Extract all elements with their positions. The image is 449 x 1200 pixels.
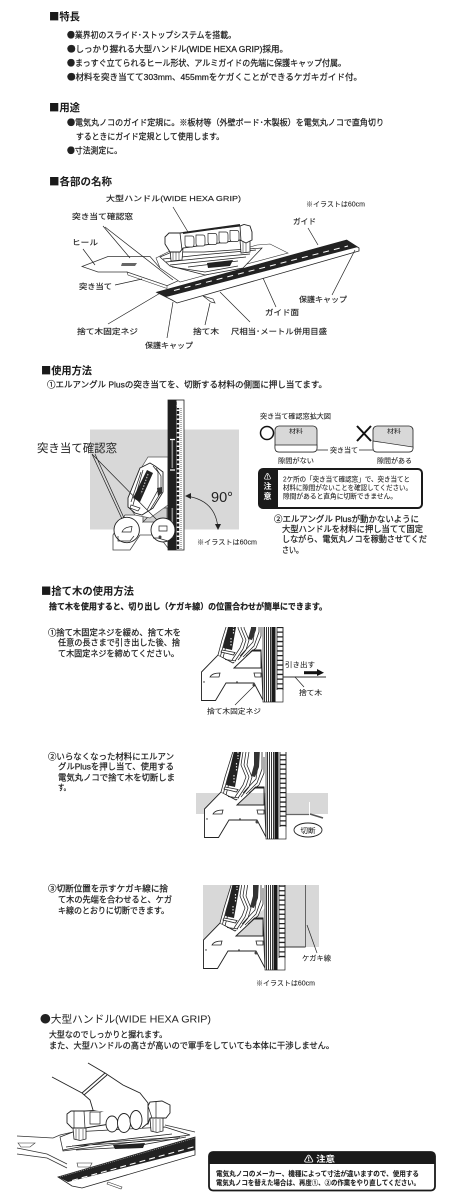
text: scrap step 3: ③切断位置を示すケガキ線に捨 — [48, 884, 169, 894]
text: wide handle description: 大型なのでしっかりと握れます。 — [49, 1030, 167, 1040]
text: step 2: ②エルアングル Plusが動かないように — [274, 514, 419, 524]
diagram: check window enlarged: 突き当て確認窓拡大図 — [260, 412, 331, 420]
text: scrap step 2: ②いらなくなった材料にエルアン — [48, 752, 174, 762]
text: step 2: さい。 — [282, 545, 303, 555]
labels: part names: ガイド面 — [265, 307, 299, 317]
dimension: 90 degrees: 90° — [211, 490, 233, 506]
section: part names — [49, 174, 365, 350]
text: uses list: ●電気丸ノコのガイド定規に。※板材等（外壁ボード･木製板）を電気丸ノコで直角切り — [67, 116, 384, 128]
text: scrap step 3 — [48, 884, 172, 916]
labels: part names: ※イラストは60cm — [306, 200, 365, 208]
callout: caution — [259, 469, 422, 508]
labels: part names: 捨て木固定ネジ — [77, 326, 138, 336]
labels: part names: 保護キャップ — [299, 294, 347, 304]
text: step 2 — [274, 514, 427, 555]
dimension: 90 degrees — [185, 490, 233, 530]
diagram: pull out scrap wood: 引き出す — [285, 660, 315, 669]
callout: caution: 電気丸ノコのメーカー、機種によって寸法が違いますので、使用する — [216, 1169, 419, 1178]
callout: caution: 意 — [264, 491, 272, 501]
labels: part names: 突き当て確認窓 — [72, 211, 133, 221]
diagram: hand gripping handle — [17, 1063, 195, 1189]
text: scrap step 1: て木固定ネジを締めてください。 — [58, 648, 179, 658]
diagram: pull out scrap wood: 捨て木 — [299, 688, 322, 697]
text: feature list: ●まっすぐ立てられるヒール形状、アルミガイドの先端に保護キャップ付属。 — [67, 57, 346, 69]
diagram: tool on material — [90, 400, 239, 550]
callout: caution: 電気丸ノコを替えた場合は、再度①、②の作業をやり直してください。 — [216, 1178, 420, 1187]
diagram: cut scrap wood — [196, 745, 328, 839]
text: scrap step 1: 任意の長さまで引き出した後、捨 — [58, 638, 181, 648]
text: step 2: しながら、電気丸ノコを稼動させてくだ — [282, 534, 427, 544]
heading: how to use: ■使用方法 — [41, 363, 92, 378]
callout: caution: 隙間があると直角に切断できません。 — [283, 492, 397, 500]
text: scrap wood intro: 捨て木を使用すると、切り出し（ケガキ線）の位置合わせが簡単にできます。 — [49, 602, 327, 612]
section: wide handle — [17, 1012, 435, 1190]
text: uses list — [67, 116, 384, 156]
labels: part names: ヒール — [72, 238, 98, 247]
callout: check window: 突き当て確認窓 — [37, 441, 117, 455]
section: scrap wood usage — [41, 584, 331, 988]
heading: scrap wood usage: ■捨て木の使用方法 — [41, 584, 134, 598]
text: feature list: ●材料を突き当てて303mm、455mmをケガくことができるケガキガイド付。 — [67, 71, 362, 83]
text: scrap step 3: キ線のとおりに切断できます。 — [58, 906, 169, 916]
section: how to use — [37, 363, 427, 555]
text: scrap step 1 — [48, 628, 181, 658]
callout: check window — [37, 441, 175, 543]
diagram: pull out scrap wood — [201, 627, 326, 715]
text: scrap step 2: グルPlusを押し当て、使用する — [58, 762, 174, 772]
text: wide handle description: また、大型ハンドルの高さが高いので軍手をしていても本体に干渉しません。 — [49, 1040, 334, 1050]
text: scrap step 2: す。 — [58, 782, 70, 792]
diagram: check window enlarged: 材料 — [387, 428, 401, 436]
callout: caution: 材料に隙間がないことを確認してください。 — [283, 483, 412, 492]
text: scrap step 2 — [48, 752, 175, 792]
text: step 2: 大型ハンドルを材料に押し当てて固定 — [282, 524, 424, 534]
diagram: tool overview — [82, 224, 359, 303]
diagram: check window enlarged: 隙間がある — [377, 456, 412, 465]
labels: part names: 尺相当･メートル併用目盛 — [231, 326, 327, 336]
text: scrap step 1: ①捨て木固定ネジを緩め、捨て木を — [48, 628, 181, 638]
text: scrap step 3: て木の先端を合わせると、ケガ — [58, 894, 172, 904]
heading: uses: ■用途 — [49, 100, 80, 115]
callout: caution: 注 — [264, 481, 272, 491]
section: uses — [49, 100, 384, 156]
labels: part names — [72, 193, 365, 350]
heading: part names: ■各部の名称 — [49, 174, 112, 189]
text: uses list: するときにガイド定規として使用します。 — [76, 132, 224, 142]
callout: caution: ⚠ — [264, 473, 271, 481]
diagram: check window enlarged: 材料 — [289, 428, 303, 436]
callout: caution — [209, 1152, 435, 1190]
labels: part names: 捨て木 — [193, 326, 219, 336]
text: feature list: ●業界初のスライド･ストップシステムを搭載。 — [67, 29, 236, 41]
text: feature list: ●しっかり握れる大型ハンドル(WIDE HEXA GRIP)採用。 — [67, 43, 288, 55]
diagram: cut scrap wood: 切断 — [300, 826, 316, 835]
diagram: align to marking line: ケガキ線 — [302, 954, 331, 962]
text: feature list — [67, 29, 362, 83]
callout: caution: ⚠ 注意 — [304, 1154, 336, 1164]
text: wide handle description — [49, 1030, 334, 1050]
note: illustration size: ※イラストは60cm — [197, 538, 257, 546]
diagram: align to marking line — [203, 876, 331, 988]
section: features — [49, 9, 362, 83]
callout: caution: 2ケ所の「突き当て確認窓」で、突き当てと — [283, 474, 410, 484]
diagram: pull out scrap wood: 捨て木固定ネジ — [207, 706, 261, 716]
text: uses list: ●寸法測定に。 — [67, 144, 122, 156]
text: scrap step 2: 電気丸ノコで捨て木を切断しま — [58, 772, 175, 782]
diagram: check window enlarged: 隙間がない — [278, 456, 314, 465]
text: step 1: ①エルアングル Plusの突き当てを、切断する材料の側面に押し当てます。 — [47, 380, 327, 390]
diagram: check window enlarged — [260, 412, 413, 465]
labels: part names: 大型ハンドル(WIDE HEXA GRIP) — [106, 193, 242, 203]
heading: features: ■特長 — [49, 9, 80, 24]
callout lines: part leaders — [83, 207, 355, 338]
heading: wide handle: ●大型ハンドル(WIDE HEXA GRIP) — [40, 1012, 211, 1026]
labels: part names: 保護キャップ — [145, 340, 193, 350]
diagram: align to marking line: ※イラストは60cm — [256, 980, 315, 988]
diagram: check window enlarged: 突き当て — [330, 446, 358, 454]
labels: part names: 突き当て — [79, 281, 112, 291]
labels: part names: ガイド — [293, 216, 316, 226]
